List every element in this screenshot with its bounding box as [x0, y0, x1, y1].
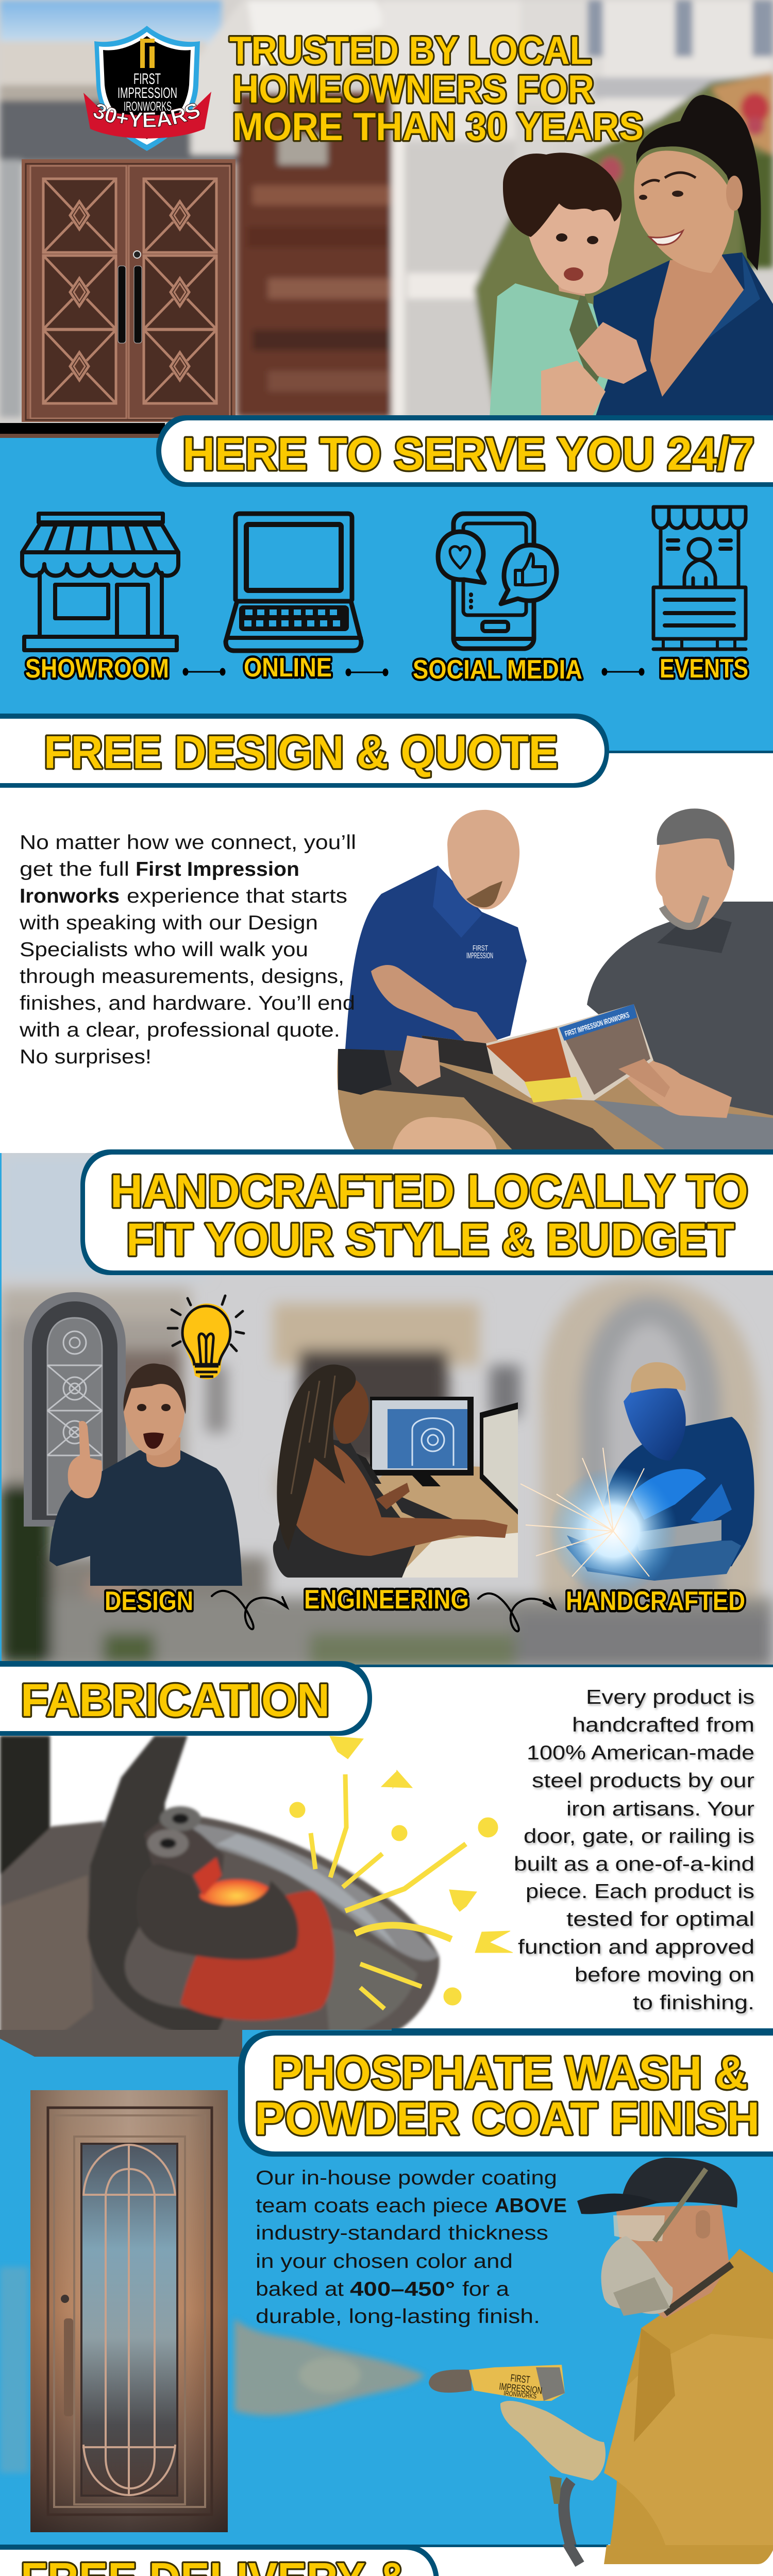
label: online: ONLINE	[244, 653, 332, 683]
heading pill	[0, 714, 609, 788]
heading pill	[238, 2030, 773, 2157]
heading pill	[156, 415, 773, 487]
panel: fabrication	[0, 1661, 773, 2030]
body text: baked at	[256, 2278, 344, 2300]
icon: phone with social bubbles	[438, 514, 557, 649]
heading pill: FIT YOUR STYLE & BUDGET	[126, 1214, 734, 1266]
body text: industry-standard thickness	[256, 2222, 548, 2244]
heading pill	[80, 1149, 773, 1275]
body text: finishes, and hardware. You’ll end	[20, 992, 355, 1014]
body text: through measurements, designs,	[20, 965, 344, 988]
hero blurred house background	[0, 0, 773, 417]
photo: design specialists with brochure: IMPRESSION	[466, 952, 493, 960]
photo: design specialists with brochure: FIRST	[473, 944, 488, 953]
hero title: TRUSTED BY LOCAL	[229, 29, 592, 73]
photo: design specialists with brochure	[337, 808, 773, 1153]
photo: welder with sparks	[520, 1362, 754, 1596]
body text: to finishing.	[633, 1992, 754, 2014]
hero title: MORE THAN 30 YEARS	[232, 105, 644, 149]
label: showroom: SHOWROOM	[25, 654, 169, 684]
heading pill: HANDCRAFTED LOCALLY TO	[110, 1166, 748, 1217]
body text: door, gate, or railing is	[524, 1825, 754, 1848]
body text	[19, 832, 356, 1068]
label: events: EVENTS	[660, 654, 748, 684]
heading pill: FABRICATION	[21, 1675, 330, 1726]
logo badge: First Impression Ironworks 30+ years: IRONWORKS	[124, 99, 172, 114]
icon: laptop	[226, 514, 361, 651]
body text: ABOVE	[495, 2195, 567, 2217]
photo: engineer at computer	[273, 1364, 518, 1578]
body text: Our in-house powder coating	[256, 2167, 557, 2189]
body text	[256, 2167, 567, 2328]
body text: piece. Each product is	[526, 1880, 754, 1903]
body text: tested for optimal	[566, 1908, 754, 1930]
panel: free delivery and installation	[0, 2544, 773, 2576]
logo badge: First Impression Ironworks 30+ years: IMPRESSION	[117, 85, 177, 101]
photo: worker with powder coat gun: IMPRESSION	[498, 2381, 543, 2397]
logo badge: First Impression Ironworks 30+ years: 30+YEARS	[93, 103, 200, 128]
heading pill	[0, 2545, 439, 2576]
hero title: HOMEOWNERS FOR	[232, 67, 594, 111]
body text: steel products by our	[532, 1770, 754, 1792]
connectors between channels	[183, 668, 644, 676]
icon: showroom storefront	[22, 514, 178, 650]
body text: Specialists who will walk you	[20, 939, 308, 961]
logo badge: First Impression Ironworks 30+ years	[83, 26, 211, 151]
body text: No matter how we connect, you’ll	[20, 832, 356, 854]
logo badge: First Impression Ironworks 30+ years: FIRST	[133, 71, 161, 88]
panel: phosphate wash and powder coat	[0, 2028, 773, 2545]
body text: 100% American-made	[527, 1742, 754, 1764]
body text: iron artisans. Your	[566, 1798, 754, 1820]
panel: handcrafted locally	[0, 1149, 773, 1665]
label: engineering: ENGINEERING	[304, 1585, 469, 1615]
powder spray cloud	[0, 2267, 425, 2473]
label: social media: SOCIAL MEDIA	[413, 655, 582, 685]
iron door with arch	[24, 1292, 126, 1527]
body text: 400–450°	[350, 2278, 455, 2300]
body text: in your chosen color and	[256, 2250, 513, 2273]
heading pill: PHOSPHATE WASH &	[272, 2047, 748, 2099]
black strip under door	[0, 423, 165, 434]
photo: smiling designer pointing up	[49, 1364, 242, 1586]
body text: First Impression	[136, 858, 299, 880]
panel: hero	[0, 0, 773, 438]
blue background	[0, 2028, 773, 2545]
heading pill	[0, 1661, 372, 1736]
photo: worker with powder coat gun	[429, 2158, 773, 2566]
body text: experience that starts	[127, 885, 347, 907]
body text: with a clear, professional quote.	[19, 1019, 340, 1041]
panel: here to serve you 24/7	[0, 415, 773, 753]
body text: built as a one-of-a-kind	[514, 1853, 754, 1875]
doodles: yellow sparks	[290, 1736, 513, 2009]
photo: worker with powder coat gun: FIRST	[510, 2372, 531, 2386]
body text: before moving on	[575, 1964, 754, 1986]
arrow: engineering to handcrafted	[478, 1594, 555, 1631]
body text: No surprises!	[20, 1046, 152, 1068]
body text: for a	[462, 2278, 509, 2300]
body text	[514, 1686, 754, 2014]
body text: function and approved	[518, 1936, 754, 1958]
heading pill: FREE DESIGN & QUOTE	[44, 727, 558, 778]
photo: finished bronze door	[30, 2090, 228, 2532]
body text: handcrafted from	[572, 1714, 754, 1736]
arrow: design to engineering	[212, 1591, 287, 1629]
photo: hot forged iron	[0, 1736, 440, 2057]
label: design: DESIGN	[105, 1586, 193, 1616]
body text: Ironworks	[20, 885, 120, 907]
photo: mother holding child	[490, 95, 773, 417]
body text: with speaking with our Design	[19, 912, 318, 934]
body text: team coats each piece	[256, 2195, 488, 2217]
hero title	[229, 29, 644, 149]
body text: durable, long-lasting finish.	[256, 2306, 540, 2328]
label: handcrafted: HANDCRAFTED	[566, 1586, 745, 1616]
hero iron double door	[22, 159, 236, 422]
photo: design specialists with brochure: FIRST IMPRESSION IRONWORKS	[564, 1011, 630, 1039]
blurred background house	[0, 1153, 773, 1669]
panel: free design and quote	[0, 714, 773, 1149]
heading pill: POWDER COAT FINISH	[255, 2093, 760, 2145]
fabrication photo overlap	[0, 2030, 242, 2057]
icon: light bulb	[168, 1296, 244, 1379]
photo: worker with powder coat gun: IRONWORKS	[503, 2389, 537, 2400]
body text: Every product is	[586, 1686, 754, 1708]
heading pill: HERE TO SERVE YOU 24/7	[182, 429, 754, 480]
body text: get the full	[20, 858, 129, 880]
icon: events booth	[653, 507, 746, 649]
